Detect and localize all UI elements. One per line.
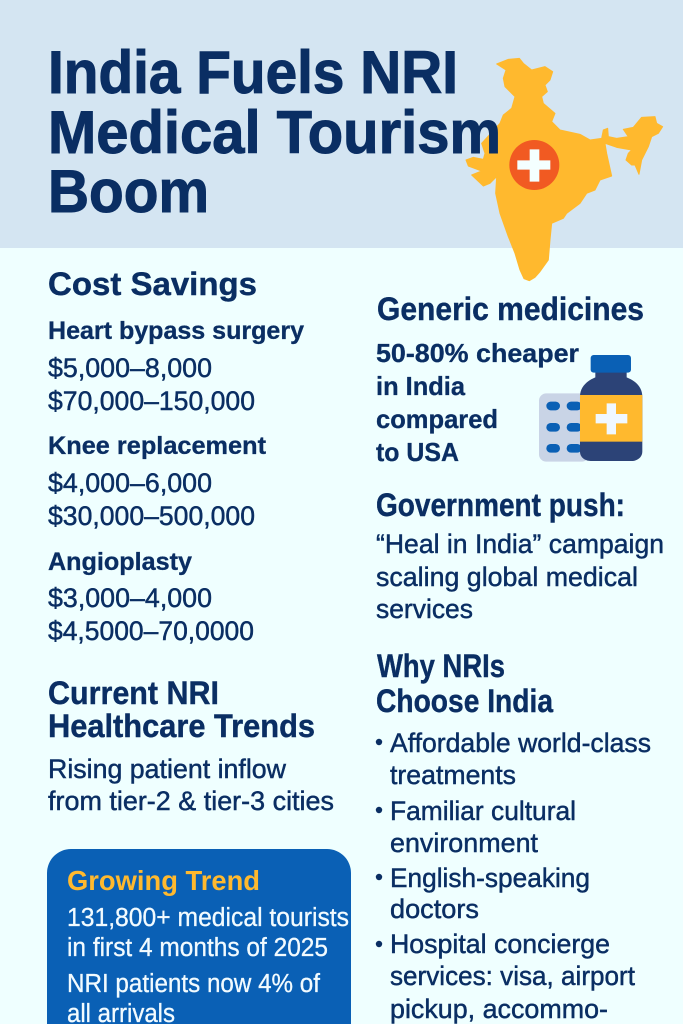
growing trend stats [67, 904, 349, 1024]
panel: cost savings [48, 266, 304, 646]
heading: cost savings: Cost Savings [48, 266, 257, 302]
icon: India map with medical cross [466, 58, 663, 281]
title: Boom [48, 158, 209, 225]
bullet: english-speaking doctors: English-speaking [390, 863, 590, 893]
growing trend stats: NRI patients now 4% of [67, 970, 321, 998]
heading: healthcare trends: Healthcare Trends [48, 708, 315, 744]
bullet: affordable treatments [376, 728, 651, 790]
panel: why NRIs choose India [376, 648, 651, 1024]
trends text: from tier-2 & tier-3 cities [48, 786, 334, 816]
bullet: english-speaking doctors [376, 863, 590, 924]
bullet: affordable treatments: treatments [390, 760, 516, 790]
panel: generic medicines [376, 291, 644, 467]
generic medicines text: compared [376, 404, 498, 434]
heading: growing trend: Growing Trend [67, 865, 260, 896]
panel: healthcare trends [48, 675, 334, 816]
generic medicines text [376, 338, 579, 467]
title [48, 39, 501, 225]
icon: medicine bottle and blister pack [539, 355, 642, 462]
knee replacement costs [48, 432, 267, 531]
knee replacement costs: Knee replacement [48, 432, 267, 460]
bullet: hospital concierge: Hospital concierge [390, 929, 610, 959]
title: India Fuels NRI [48, 39, 458, 106]
knee replacement costs: $30,000–500,000 [48, 501, 255, 531]
government push text: “Heal in India” campaign [376, 529, 664, 559]
heading: why NRIs choose India [376, 648, 553, 719]
angioplasty costs: Angioplasty [48, 548, 192, 576]
header band [0, 0, 683, 248]
panel: growing trend [47, 849, 351, 1024]
growing trend stats: 131,800+ medical tourists [67, 904, 349, 932]
knee replacement costs: $4,000–6,000 [48, 468, 212, 498]
bullet: cultural environment: environment [390, 828, 539, 858]
heart bypass costs [48, 317, 304, 416]
heading: government push: Government push: [376, 487, 625, 523]
heart bypass costs: $5,000–8,000 [48, 353, 212, 383]
generic medicines text: to USA [376, 437, 459, 467]
heart bypass costs: Heart bypass surgery [48, 317, 304, 345]
bullet: cultural environment [376, 796, 576, 858]
generic medicines text: 50-80% cheaper [376, 338, 579, 368]
panel: government push [376, 487, 664, 624]
government push text: scaling global medical [376, 562, 638, 592]
generic medicines text: in India [376, 371, 466, 401]
bullet: hospital concierge: services: visa, airport [390, 961, 636, 991]
government push text: services [376, 594, 473, 624]
bullet: cultural environment: Familiar cultural [390, 796, 576, 826]
heading: healthcare trends: Current NRI [48, 675, 219, 711]
heading: generic medicines: Generic medicines [377, 291, 644, 327]
bullet: affordable treatments: Affordable world-class [390, 728, 651, 758]
angioplasty costs: $4,5000–70,0000 [48, 616, 254, 646]
trends text [48, 754, 334, 816]
bullet: english-speaking doctors: doctors [390, 894, 479, 924]
bullet: hospital concierge: pickup, accommo- [390, 994, 608, 1024]
heart bypass costs: $70,000–150,000 [48, 386, 255, 416]
bullet: hospital concierge [376, 929, 636, 1024]
heading: healthcare trends [48, 675, 315, 744]
trends text: Rising patient inflow [48, 754, 287, 784]
title: Medical Tourism [48, 99, 501, 166]
angioplasty costs: $3,000–4,000 [48, 583, 212, 613]
heading: why NRIs choose India: Choose India [376, 683, 553, 719]
growing trend stats: in first 4 months of 2025 [67, 934, 328, 962]
heading: why NRIs choose India: Why NRIs [377, 648, 505, 684]
angioplasty costs [48, 548, 254, 646]
government push text [376, 529, 664, 624]
